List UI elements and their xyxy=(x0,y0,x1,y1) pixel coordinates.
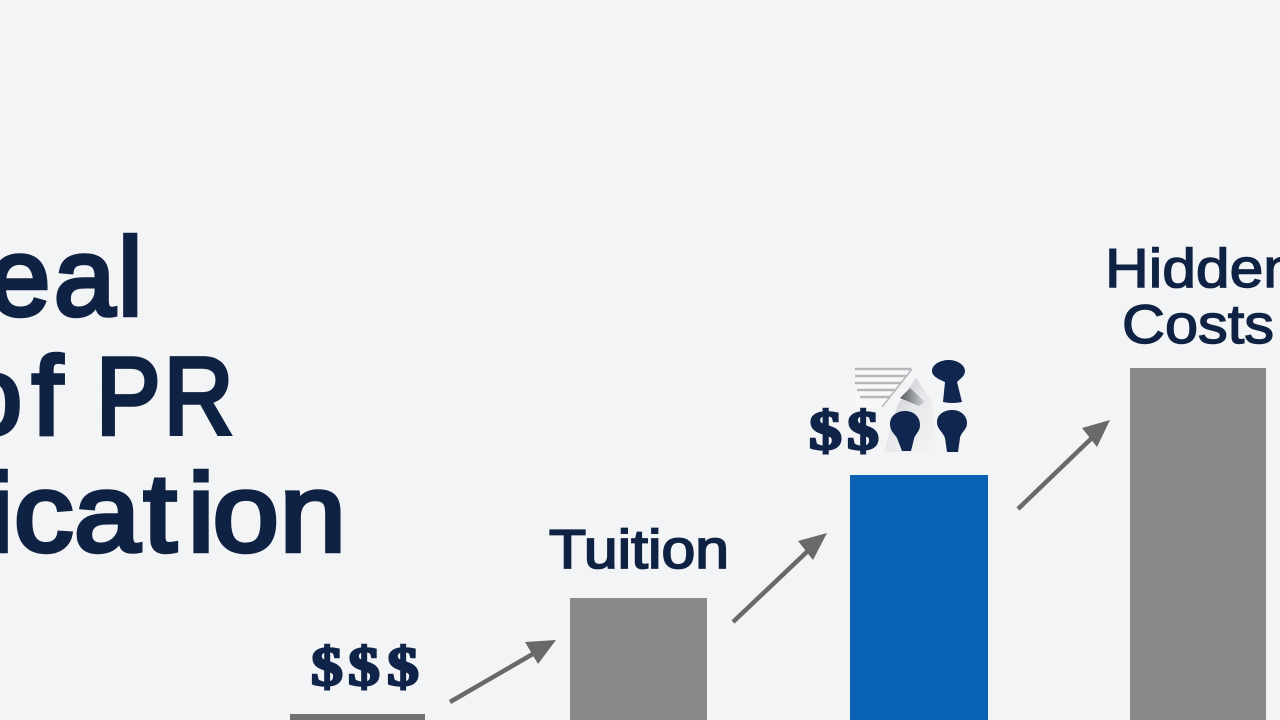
bar: first step xyxy=(290,714,425,720)
icon: dollar signs, third step: $ xyxy=(809,400,842,461)
bar: hidden costs xyxy=(1130,368,1266,720)
label: hidden costs: Hidden xyxy=(1105,237,1280,299)
label: tuition: Tuition xyxy=(549,518,729,580)
icon: lower left keyhole xyxy=(890,411,920,451)
label: hidden costs: Costs xyxy=(1122,293,1274,355)
icon: document lines xyxy=(855,367,913,408)
icon: dollar signs, first step: $ xyxy=(311,636,343,697)
icon: dollar signs, third step: $ xyxy=(847,400,879,461)
icon: dollar signs, third step xyxy=(809,400,879,461)
arrow: highlighted to hidden costs xyxy=(1018,420,1110,509)
label: hidden costs xyxy=(1105,237,1280,355)
title xyxy=(0,216,346,575)
bar: tuition xyxy=(570,598,707,720)
bar: highlighted cost xyxy=(850,475,988,720)
icon: folded paper xyxy=(884,378,936,452)
icon: top keyhole xyxy=(932,360,965,403)
icon: document, dollars and keyholes xyxy=(809,360,967,461)
arrow: tuition to highlighted xyxy=(733,533,827,622)
icon: lower right keyhole xyxy=(937,410,967,452)
icon: dollar signs, first step: $ xyxy=(348,636,380,697)
icon: dollar signs, first step xyxy=(311,636,419,697)
title: PR xyxy=(96,334,234,457)
icon: dollar signs, first step: $ xyxy=(387,636,419,697)
arrow: first to tuition xyxy=(450,640,556,702)
icon: fold shadow xyxy=(900,388,925,406)
